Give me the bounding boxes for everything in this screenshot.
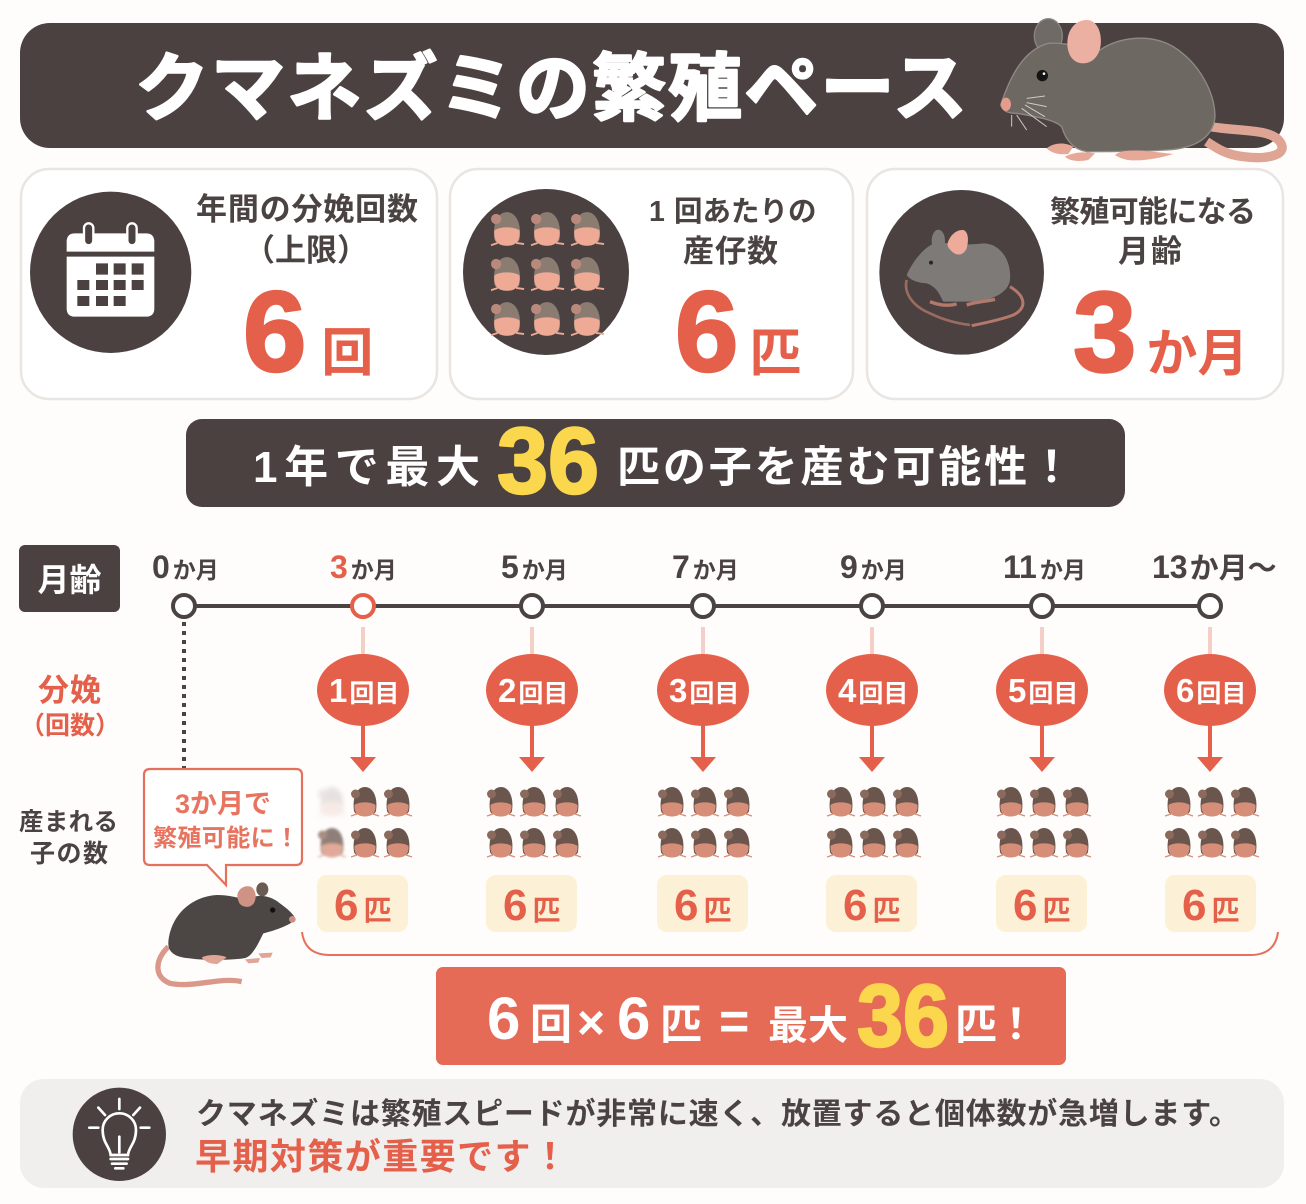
column 4: fourth birth [826, 627, 921, 932]
formula unit: ！ [995, 1001, 1037, 1048]
speech bubble: 3か月で [175, 789, 271, 819]
icon: gray mouse [879, 190, 1044, 355]
callout number 36: 36 [497, 408, 599, 513]
value: 6 pups: 6匹 [675, 269, 801, 396]
timeline axis [152, 549, 1277, 617]
column 6: sixth birth [1164, 627, 1259, 932]
advice text line 1: クマネズミは繁殖スピードが非常に速く、放置すると個体数が急増します。 [196, 1097, 1239, 1131]
advice text line 2: 早期対策が重要です！ [195, 1136, 568, 1177]
label: upper limit: （上限） [244, 233, 368, 268]
row label: pups born [19, 808, 118, 868]
illustration: large mouse on title [1001, 19, 1282, 161]
bracket under columns [302, 932, 1278, 955]
callout text start: 1年で最大 [253, 443, 480, 492]
month labels: 3か月 [330, 549, 397, 585]
timeline heading: month age [19, 545, 120, 612]
column 2: second birth: 2回目 [498, 672, 568, 709]
month labels: 7か月 [672, 549, 739, 585]
row label: births count: （回数） [20, 712, 120, 740]
month labels [152, 549, 1277, 585]
row label: births count: 分娩 [38, 673, 101, 708]
formula: 6 times 6: 最大 [768, 1004, 848, 1048]
value: 3 months: 3か月 [1073, 269, 1248, 396]
speech bubble: 繁殖可能に！ [153, 825, 299, 852]
column 4: fourth birth: 6匹 [843, 881, 900, 930]
column 6: sixth birth: 6匹 [1182, 881, 1240, 930]
column 6: sixth birth: 6回目 [1176, 672, 1246, 709]
row label: births count [20, 673, 120, 740]
column 3: third birth: 6匹 [674, 881, 732, 930]
month labels: 5か月 [501, 549, 568, 585]
illustration: small mouse [158, 882, 296, 985]
label: per litter: 1 [649, 196, 665, 228]
timeline nodes [173, 595, 1221, 617]
icon: nine baby mice [463, 189, 629, 355]
column 2: second birth: 6匹 [503, 881, 560, 930]
panel: litter size [450, 169, 853, 399]
formula: 6 times 6: × [577, 997, 605, 1050]
month labels: 0か月 [152, 549, 219, 585]
icon: light bulb [73, 1088, 166, 1181]
formula: 6 times 6: 6 [487, 985, 520, 1052]
panel: births per year [21, 169, 437, 399]
formula: 6 times 6: = [719, 993, 749, 1051]
column 3: third birth: 3回目 [669, 672, 739, 709]
month labels: 9か月 [840, 549, 907, 585]
formula: 6 times 6: 匹 [660, 1001, 702, 1048]
column 1: first birth: 6匹 [334, 881, 392, 930]
row label: pups born: 子の数 [30, 840, 108, 868]
title banner [20, 23, 1284, 148]
advice panel [20, 1079, 1284, 1188]
formula: 6 times 6: 回 [530, 1001, 572, 1048]
pups: six, first ones faded [318, 787, 412, 858]
dotted line from birth [182, 622, 186, 768]
title text: クマネズミの繁殖ペース [135, 47, 967, 130]
column 1: first birth: 1回目 [329, 672, 399, 709]
speech bubble [144, 769, 302, 885]
column 5: fifth birth: 5回目 [1008, 672, 1078, 709]
formula unit: 匹 [955, 1001, 997, 1048]
month labels: 13か月～ [1152, 549, 1277, 585]
column 5: fifth birth: 6匹 [1013, 881, 1070, 930]
label: births per year: 年間の分娩回数 [196, 192, 418, 227]
label: month age: 月齢 [1118, 234, 1182, 269]
panel: breeding age [867, 169, 1283, 399]
total formula box [436, 966, 1066, 1065]
callout text end: 匹の子を産む可能性！ [617, 444, 1073, 492]
column 2: second birth [486, 627, 581, 932]
column 1: first birth [317, 627, 412, 932]
formula result 36: 36 [857, 966, 949, 1065]
column 5: fifth birth [996, 627, 1091, 932]
formula: 6 times 6: 6 [617, 985, 650, 1052]
label: per litter: 回あたりの [674, 196, 817, 228]
timeline heading: month age: 月齢 [37, 562, 102, 598]
row label: pups born: 産まれる [19, 808, 118, 836]
column 3: third birth [657, 627, 752, 932]
label: breeding possible: 繁殖可能になる [1050, 196, 1256, 229]
icon: calendar [30, 192, 191, 353]
month labels: 11か月 [1003, 549, 1086, 585]
value: 6 births: 6 回 [243, 269, 373, 396]
callout: 36 pups per year [186, 408, 1125, 513]
label: number of pups: 産仔数 [683, 234, 778, 269]
column 4: fourth birth: 4回目 [838, 672, 908, 709]
